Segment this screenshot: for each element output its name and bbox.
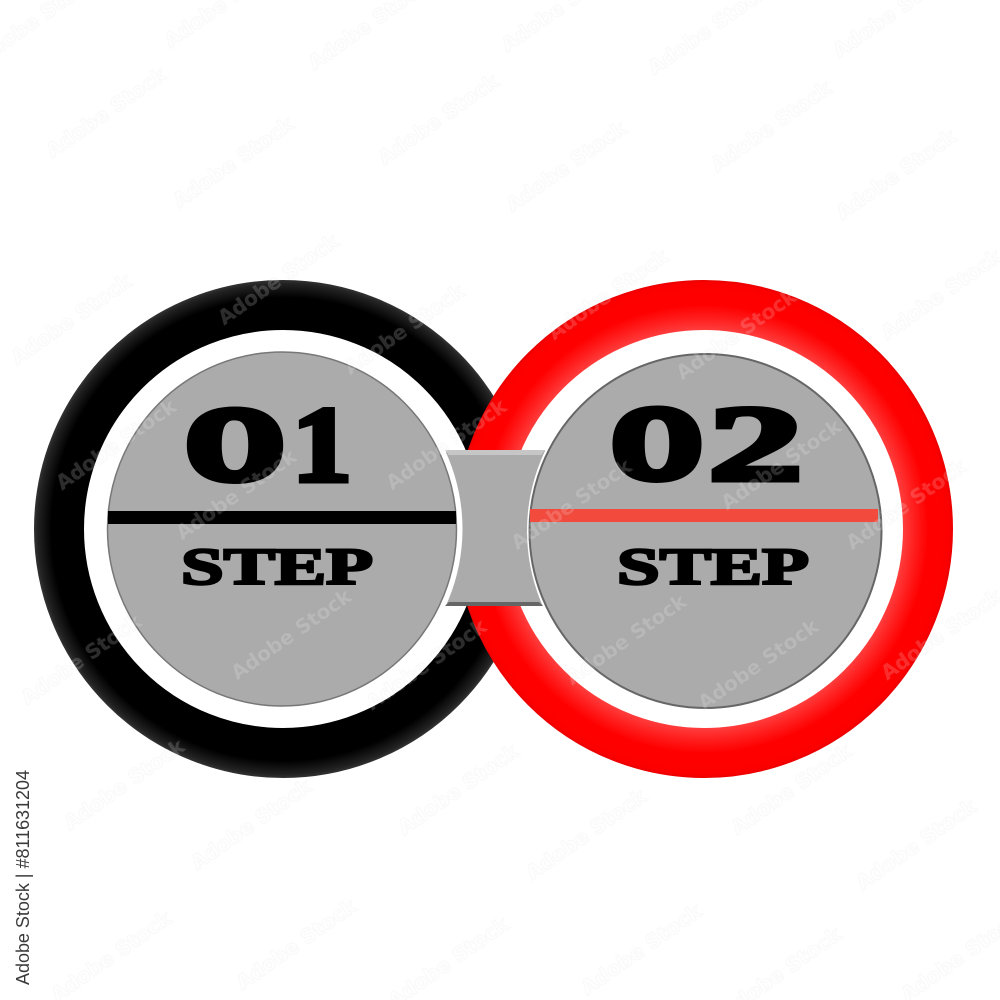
stock watermark pattern: Adobe Stock: [171, 444, 301, 545]
panel: step 01: [108, 352, 456, 706]
stock watermark pattern: Adobe Stock: [693, 614, 823, 715]
number 02: [614, 385, 803, 504]
stock watermark pattern: Adobe Stock: [706, 76, 836, 177]
stock watermark pattern: Adobe Stock: [381, 394, 511, 495]
stock watermark pattern: Adobe Stock: [41, 62, 171, 163]
stock watermark pattern: Adobe Stock: [851, 794, 981, 895]
stock watermark pattern: Adobe Stock: [576, 899, 706, 1000]
red ring: [480, 305, 928, 753]
stock watermark pattern: Adobe Stock: [59, 734, 189, 835]
red divider: [530, 509, 878, 522]
number 02: 0: [614, 388, 700, 499]
label STEP: STEP: [181, 539, 373, 596]
stock watermark pattern: Adobe Stock: [51, 394, 181, 495]
stock watermark pattern: Adobe Stock: [186, 774, 316, 875]
stock watermark pattern: Adobe Stock: [168, 112, 298, 213]
stock watermark pattern: Adobe Stock: [226, 584, 356, 685]
stock watermark pattern: Adobe Stock: [16, 609, 146, 710]
stock watermark pattern: Adobe Stock: [671, 284, 801, 385]
stock watermark pattern: Adobe Stock: [831, 124, 961, 225]
black divider: [108, 511, 456, 524]
number 01: 0: [189, 389, 281, 500]
left grey disc: [108, 352, 456, 706]
stock watermark pattern: Adobe Stock: [213, 229, 343, 330]
connector block between the circles: [102, 346, 884, 714]
stock watermark pattern: Adobe Stock: [561, 589, 691, 690]
vertical stock id: Adobe Stock | #811631204: [13, 770, 33, 985]
stock watermark pattern: Adobe Stock: [506, 454, 636, 555]
stock watermark pattern: Adobe Stock: [339, 279, 469, 380]
black ring: [59, 305, 507, 753]
stock watermark pattern: Adobe Stock: [521, 784, 651, 885]
stock watermark pattern: Adobe Stock: [361, 614, 491, 715]
right grey disc: [530, 354, 882, 708]
stock watermark pattern: Adobe Stock: [393, 739, 523, 840]
panel: step 02: [530, 354, 882, 708]
stock watermark pattern: Adobe Stock: [543, 244, 673, 345]
number 01: [189, 386, 352, 505]
stock watermark pattern: Adobe Stock: [501, 116, 631, 217]
stock watermark pattern: Adobe Stock: [841, 454, 971, 555]
stock watermark pattern: Adobe Stock: [726, 739, 856, 840]
stock watermark pattern: Adobe Stock: [231, 894, 361, 995]
number 01: 1: [292, 386, 352, 505]
stock watermark pattern: Adobe Stock: [6, 269, 136, 370]
stock watermark pattern: Adobe Stock: [373, 69, 503, 170]
number 02: 2: [708, 385, 803, 504]
label STEP: STEP: [617, 539, 809, 596]
stock watermark pattern: Adobe Stock: [716, 414, 846, 515]
